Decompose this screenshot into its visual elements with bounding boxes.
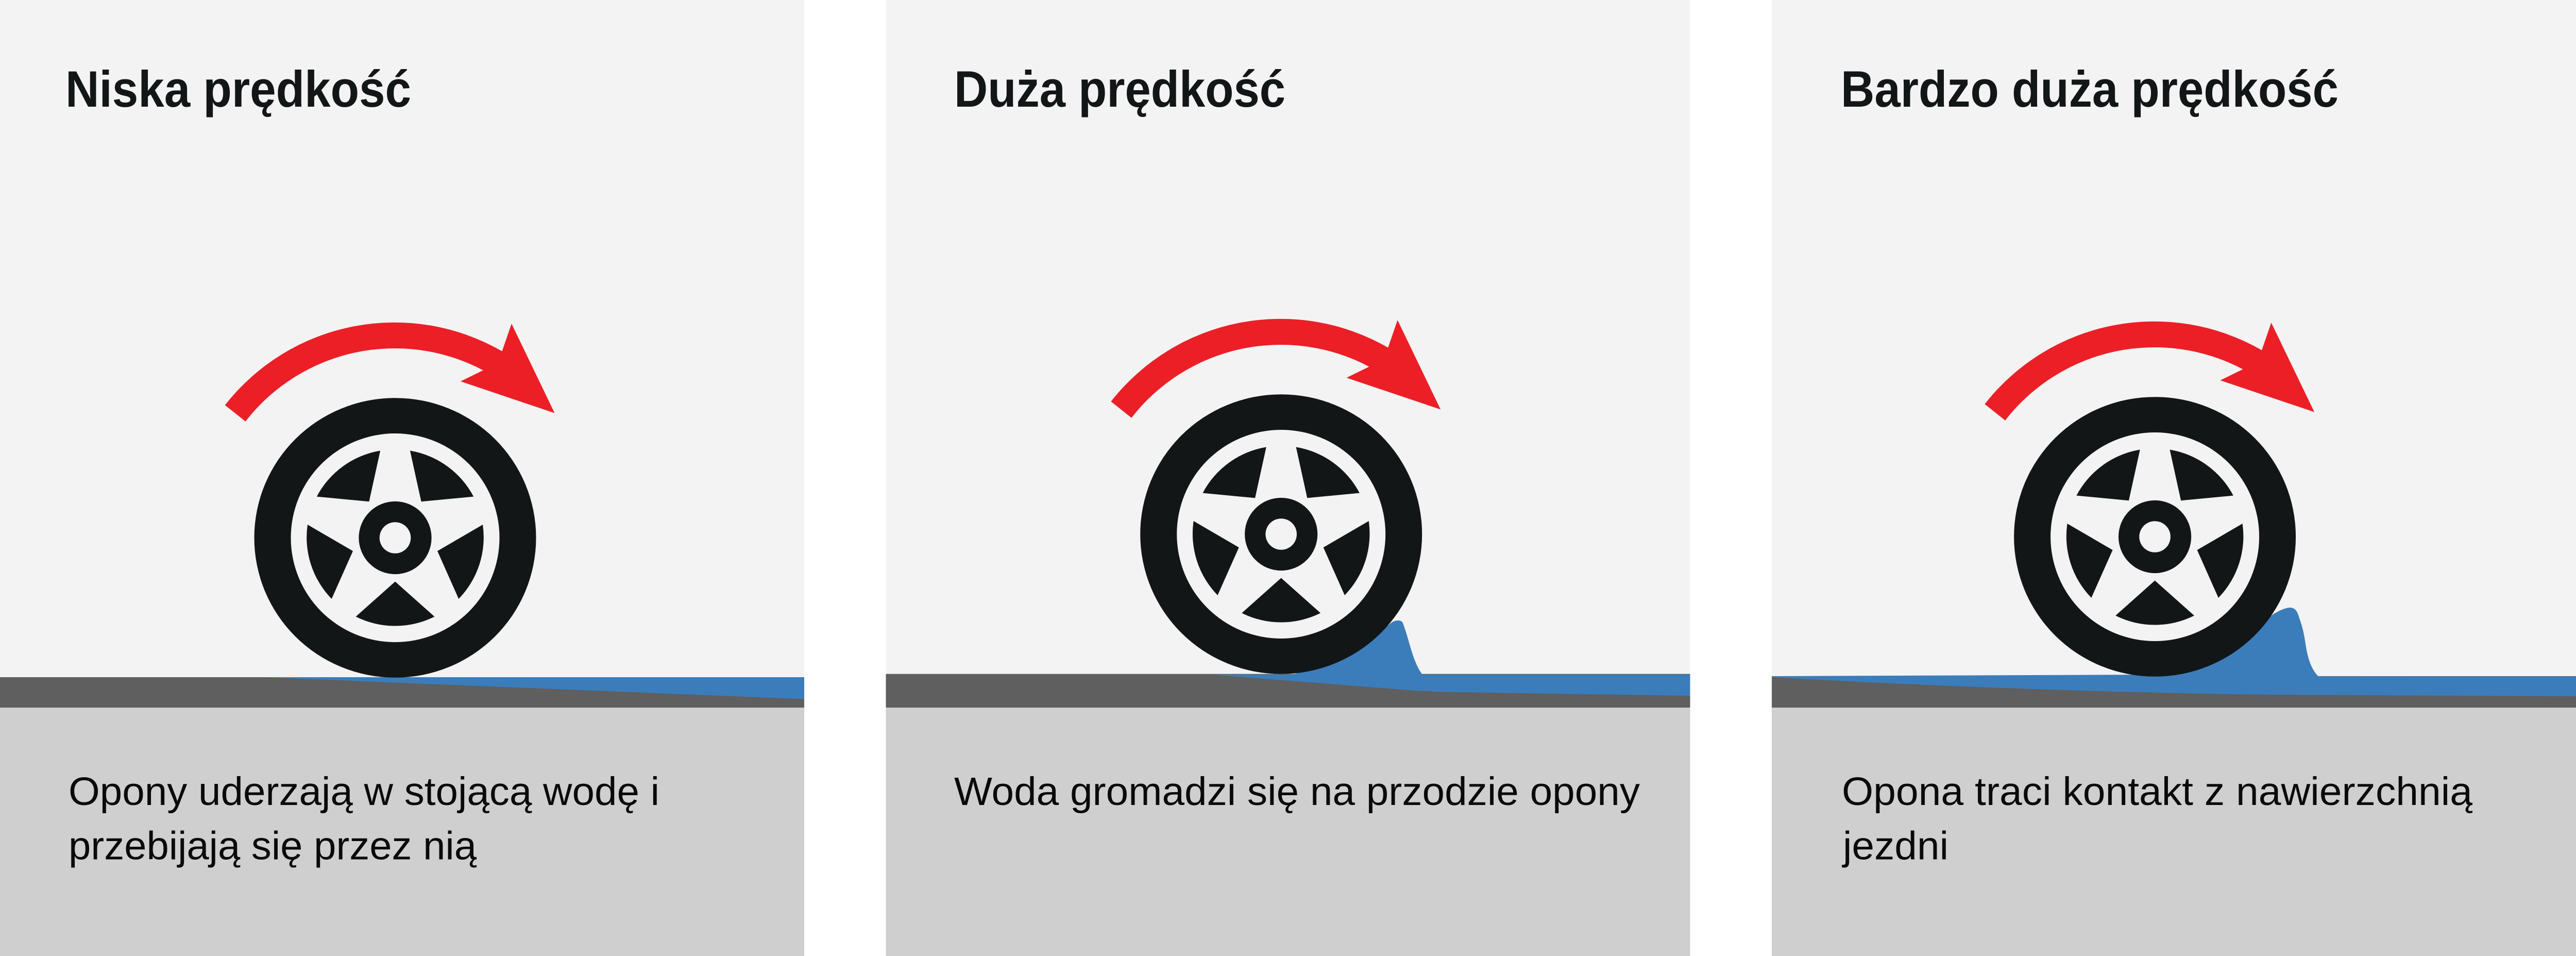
road surface (886, 674, 1690, 708)
caption: very high speed: Opona traci kontakt z nawierzchnią (1842, 769, 2472, 814)
panel: very high speed (1772, 0, 2576, 956)
panel: high speed (886, 0, 1690, 956)
caption: low speed: przebijają się przez nią (69, 824, 477, 868)
icon: wheel (2014, 397, 2296, 677)
rotation arrow (1985, 322, 2314, 421)
caption: high speed: Woda gromadzi się na przodzie opony (954, 769, 1640, 814)
panel: low speed (0, 0, 804, 956)
heading: very high speed: Bardzo duża prędkość (1841, 60, 2338, 118)
water layer (263, 677, 804, 699)
caption: low speed: Opony uderzają w stojącą wodę i (69, 769, 659, 814)
road surface (0, 677, 804, 708)
rotation arrow (225, 323, 554, 422)
water wave (1772, 608, 2576, 696)
water wave (1212, 620, 1690, 696)
rotation arrow (1111, 319, 1440, 418)
heading: high speed: Duża prędkość (954, 60, 1285, 118)
caption: very high speed: jezdni (1842, 824, 1948, 868)
heading: low speed: Niska prędkość (65, 60, 411, 118)
icon: wheel (255, 398, 536, 678)
road surface (1772, 676, 2576, 708)
icon: wheel (1140, 394, 1422, 674)
